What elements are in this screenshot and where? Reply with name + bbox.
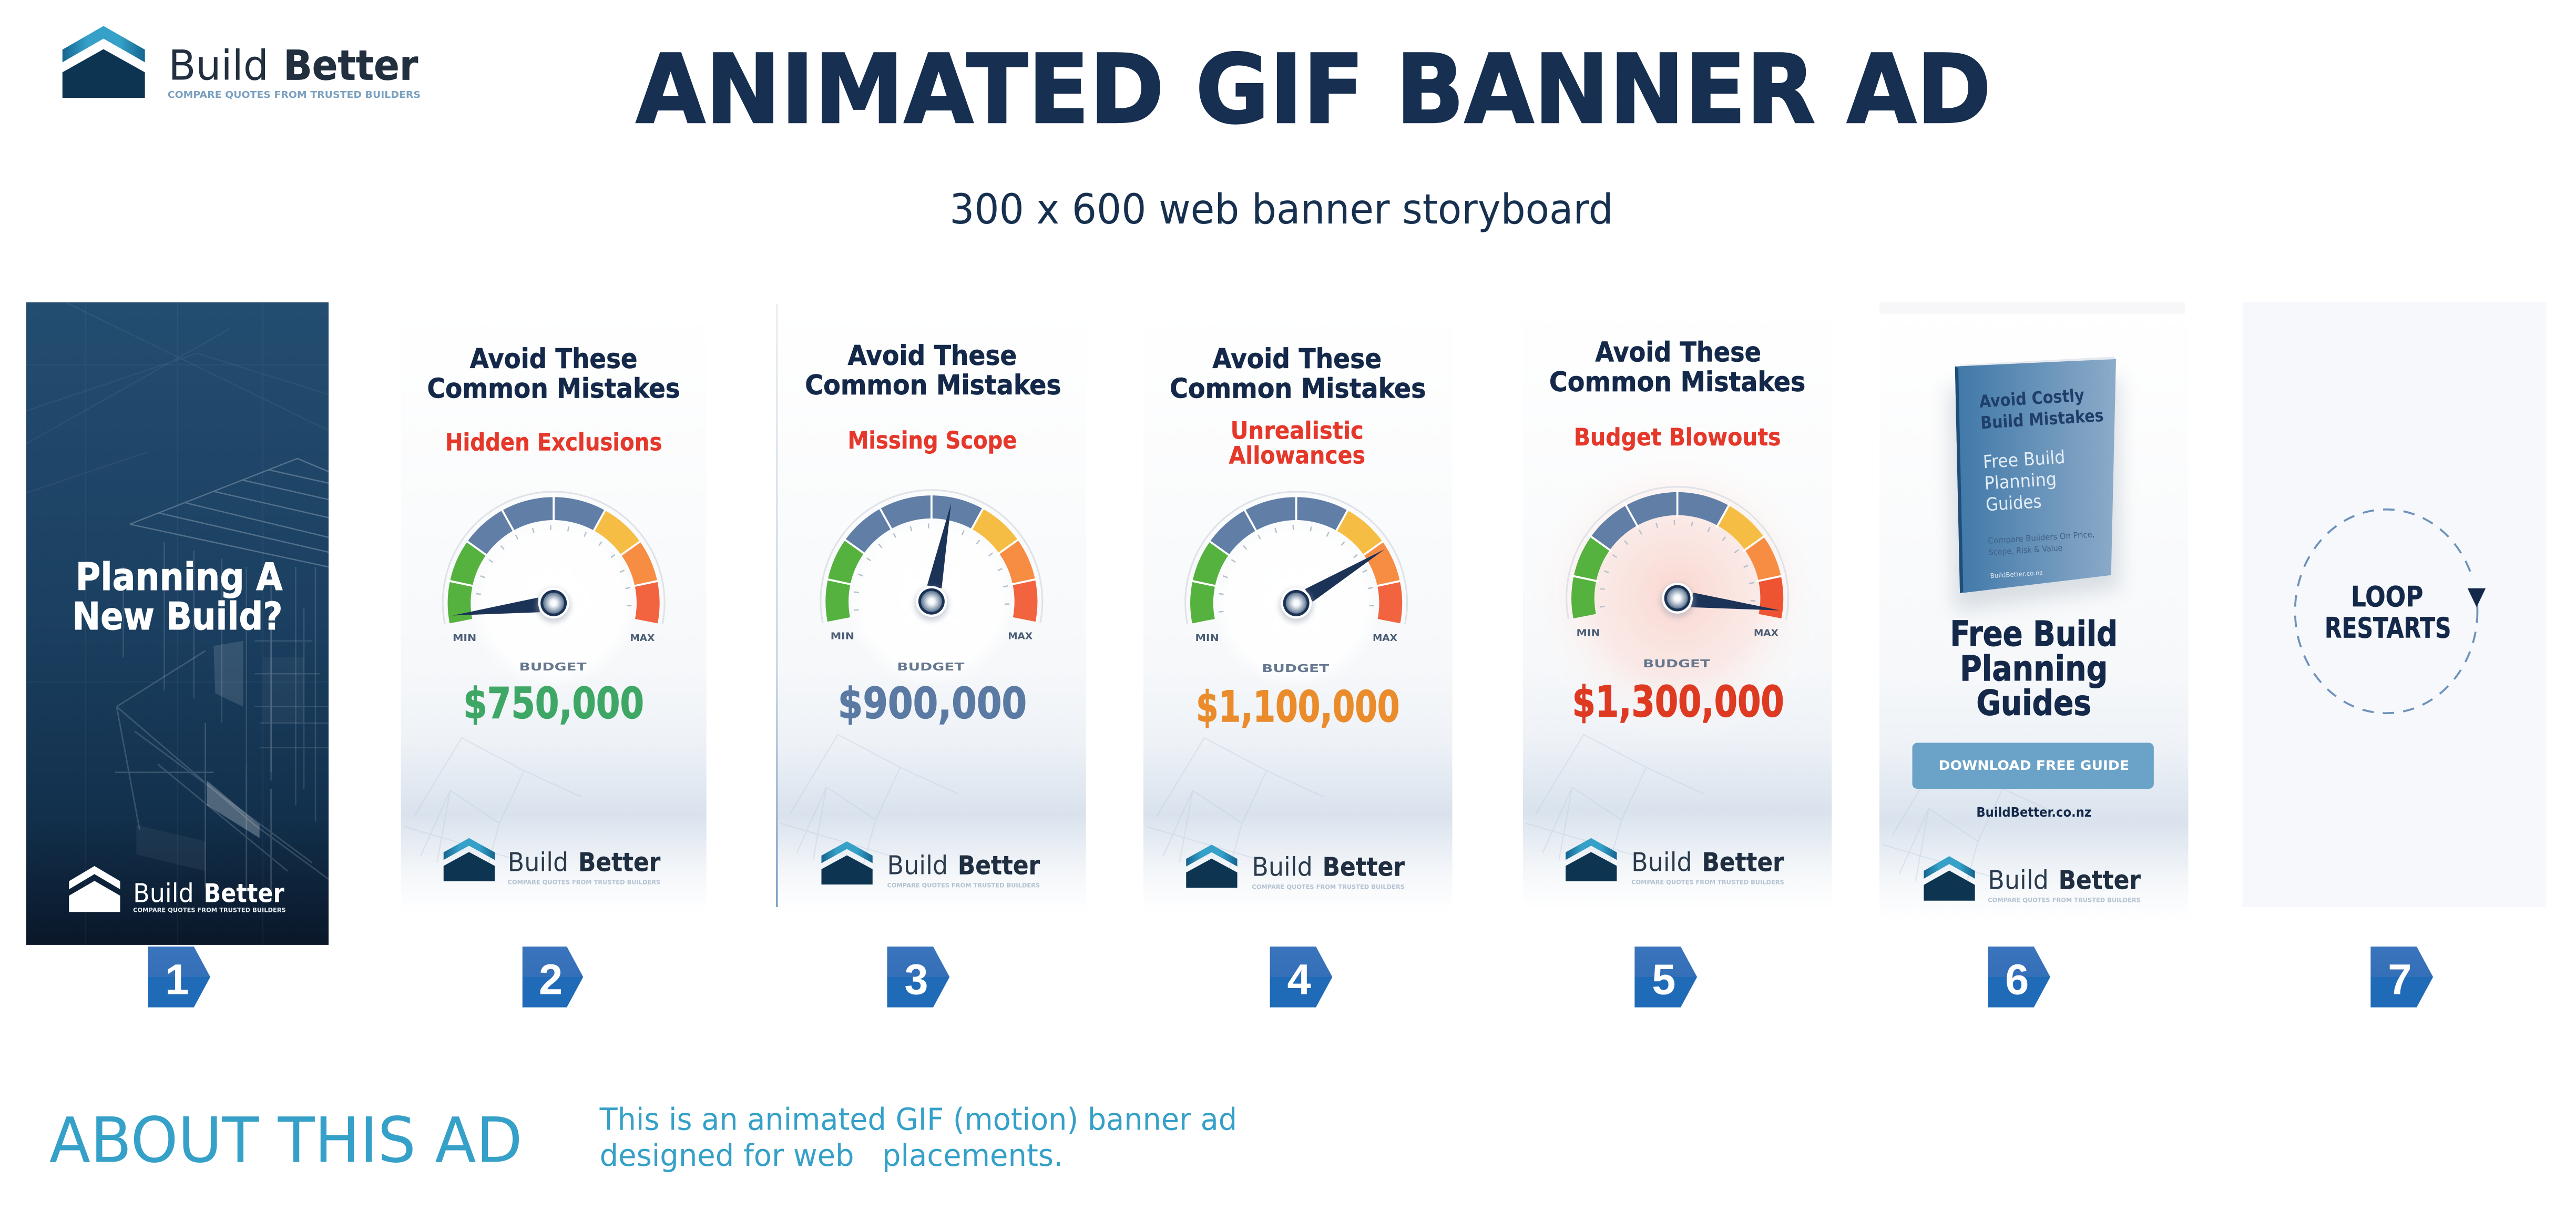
budget label: BUDGET xyxy=(1643,657,1711,670)
heading xyxy=(1170,343,1426,404)
logo: Better xyxy=(958,850,1040,880)
logo xyxy=(1924,856,2141,904)
book cover: Guides xyxy=(1985,491,2042,515)
panel 2: hidden exclusions xyxy=(401,304,707,912)
book cover xyxy=(1948,357,2119,611)
heading: Common Mistakes xyxy=(805,370,1061,401)
brand logo: Build xyxy=(168,42,269,90)
mistake label: Unrealistic xyxy=(1231,416,1364,444)
subtitle: 300 x 600 web banner storyboard xyxy=(949,186,1613,233)
step badge 5: 5 xyxy=(1652,956,1675,1004)
budget gauge: MAX xyxy=(1373,633,1397,644)
website: BuildBetter.co.nz xyxy=(1976,805,2091,820)
heading: Common Mistakes xyxy=(427,373,680,404)
budget label: BUDGET xyxy=(897,660,965,673)
white logo: Build xyxy=(133,878,194,909)
headline: New Build? xyxy=(73,594,283,638)
step badge 4: 4 xyxy=(1287,956,1311,1004)
loop arrow xyxy=(2295,510,2486,713)
mistake label: Hidden Exclusions xyxy=(445,428,662,456)
title: ANIMATED GIF BANNER AD xyxy=(636,34,1991,145)
book cover: BuildBetter.co.nz xyxy=(1990,568,2043,579)
heading: Guides xyxy=(1976,683,2091,723)
step badge 7 xyxy=(2370,947,2433,1008)
step badge 2 xyxy=(523,947,583,1008)
step badge 4 xyxy=(1270,947,1332,1008)
logo xyxy=(821,841,1040,889)
budget label: BUDGET xyxy=(1262,662,1330,675)
heading: Avoid These xyxy=(1212,343,1382,375)
mistake label: Budget Blowouts xyxy=(1574,423,1781,451)
logo: Better xyxy=(578,847,661,877)
wireframe house illustration xyxy=(26,302,329,945)
headline: Planning A xyxy=(76,555,283,599)
logo xyxy=(1186,845,1405,891)
heading: Free Build xyxy=(1950,614,2118,654)
about heading: ABOUT THIS AD xyxy=(49,1104,523,1177)
panel 5: budget blowouts xyxy=(1523,301,1832,909)
budget gauge xyxy=(1567,487,1788,638)
budget value: $750,000 xyxy=(463,679,644,729)
step badge 5 xyxy=(1634,947,1697,1008)
heading xyxy=(1549,337,1805,398)
logo: Build xyxy=(1988,865,2049,896)
heading: Common Mistakes xyxy=(1170,373,1426,404)
step badge 3: 3 xyxy=(904,956,928,1004)
budget gauge: MIN xyxy=(453,633,476,644)
loop label: LOOP xyxy=(2351,581,2423,613)
logo: COMPARE QUOTES FROM TRUSTED BUILDERS xyxy=(1252,883,1405,891)
red glow xyxy=(1526,444,1828,746)
logo: Better xyxy=(2059,865,2141,896)
brand logo: Better xyxy=(283,42,418,90)
logo: COMPARE QUOTES FROM TRUSTED BUILDERS xyxy=(1988,897,2141,904)
book cover: Avoid Costly xyxy=(1979,385,2085,412)
step badge 7: 7 xyxy=(2388,956,2411,1004)
budget value: $1,100,000 xyxy=(1196,683,1399,732)
logo xyxy=(1566,838,1784,886)
logo: Build xyxy=(887,850,948,880)
white logo: Better xyxy=(204,878,284,909)
step badge 3 xyxy=(887,947,949,1008)
panel 3: missing scope xyxy=(776,304,1086,912)
loop label: RESTARTS xyxy=(2325,612,2451,644)
budget gauge: MAX xyxy=(1008,632,1033,642)
heading: Planning xyxy=(1960,649,2108,689)
loop label xyxy=(2325,581,2451,644)
book cover: Planning xyxy=(1984,469,2057,494)
budget gauge: MAX xyxy=(630,633,655,644)
budget gauge xyxy=(821,490,1042,687)
step badge 1 xyxy=(148,947,210,1008)
download button: DOWNLOAD FREE GUIDE xyxy=(1938,758,2129,773)
heading: Avoid These xyxy=(848,340,1017,372)
book cover: Build Mistakes xyxy=(1980,405,2104,433)
panel 1: planning a new build xyxy=(26,302,329,945)
white logo xyxy=(69,866,286,913)
budget gauge xyxy=(443,492,665,688)
brand logo: COMPARE QUOTES FROM TRUSTED BUILDERS xyxy=(168,89,421,100)
heading: Avoid These xyxy=(1595,337,1761,368)
logo: Better xyxy=(1323,852,1405,882)
step badge 2: 2 xyxy=(539,956,563,1004)
heading xyxy=(1950,614,2118,723)
about description: designed for web placements. xyxy=(600,1137,1063,1173)
step badge 6 xyxy=(1988,947,2050,1008)
budget value: $900,000 xyxy=(838,679,1027,729)
logo: COMPARE QUOTES FROM TRUSTED BUILDERS xyxy=(1631,878,1784,886)
panel 7: loop restarts xyxy=(2243,302,2547,907)
step badge 6: 6 xyxy=(2005,956,2029,1004)
heading: Common Mistakes xyxy=(1549,367,1805,398)
mistake label: Missing Scope xyxy=(848,426,1017,454)
budget gauge: MIN xyxy=(1195,633,1219,644)
budget gauge: MAX xyxy=(1754,628,1778,638)
logo: Build xyxy=(1252,852,1313,882)
logo: COMPARE QUOTES FROM TRUSTED BUILDERS xyxy=(508,878,660,886)
brand logo xyxy=(63,26,421,100)
logo: COMPARE QUOTES FROM TRUSTED BUILDERS xyxy=(887,881,1040,889)
heading xyxy=(805,340,1061,401)
headline xyxy=(73,555,283,638)
budget gauge: MIN xyxy=(1576,628,1600,638)
budget gauge xyxy=(1185,492,1407,688)
heading: Avoid These xyxy=(470,343,638,375)
budget label: BUDGET xyxy=(519,660,587,673)
about description: This is an animated GIF (motion) banner ad xyxy=(599,1101,1237,1137)
budget value: $1,300,000 xyxy=(1572,677,1784,727)
book cover: Scope, Risk & Value xyxy=(1988,543,2063,557)
download button xyxy=(1913,743,2154,789)
heading xyxy=(427,343,680,404)
book cover: Compare Builders On Price, xyxy=(1988,530,2095,546)
logo xyxy=(444,838,661,886)
white logo: COMPARE QUOTES FROM TRUSTED BUILDERS xyxy=(133,906,286,913)
budget gauge: MIN xyxy=(831,632,854,642)
logo: Better xyxy=(1702,847,1784,877)
mistake label: Allowances xyxy=(1229,441,1365,469)
panel 6: free build planning guides xyxy=(1879,302,2188,920)
mistake label xyxy=(1229,416,1365,469)
logo: Build xyxy=(1631,847,1692,877)
panel 4: unrealistic allowances xyxy=(1143,304,1452,912)
about description xyxy=(599,1101,1237,1173)
step badge 1: 1 xyxy=(165,956,189,1004)
book cover: Free Build xyxy=(1982,447,2066,473)
logo: Build xyxy=(508,847,568,877)
